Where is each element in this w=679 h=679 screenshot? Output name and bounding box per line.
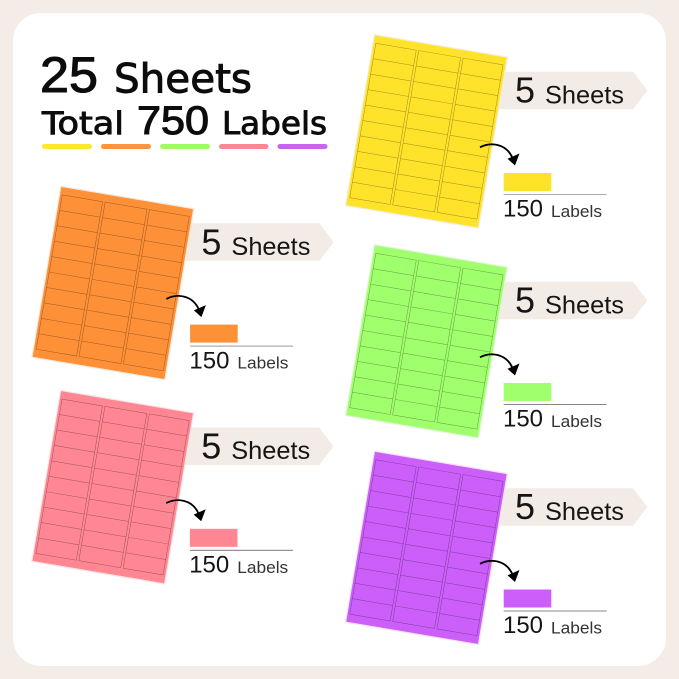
banner: 5 Sheets: Sheets (545, 498, 624, 526)
label count: 150 Labels: 150 (503, 196, 543, 223)
label count: 150 Labels: 150 (189, 551, 229, 578)
heading: Total 750 Labels: Total (41, 106, 124, 142)
label count: 150 Labels (189, 529, 293, 578)
heading: 25 Sheets: 25 (40, 47, 98, 103)
banner: 5 Sheets (490, 70, 647, 111)
heading: Total 750 Labels: Labels (222, 106, 327, 142)
banner: 5 Sheets: 5 (515, 486, 535, 527)
purple label sheet (346, 451, 507, 645)
banner: 5 Sheets (176, 426, 334, 466)
label count: 150 Labels (503, 173, 607, 223)
label count: 150 Labels: Labels (551, 202, 602, 221)
banner: 5 Sheets: Sheets (231, 437, 310, 465)
banner: 5 Sheets (490, 486, 647, 527)
label count: 150 Labels (503, 383, 607, 433)
label count: 150 Labels (503, 590, 607, 639)
heading: 25 Sheets (40, 47, 252, 103)
banner: 5 Sheets: 5 (201, 221, 221, 262)
heading: Total 750 Labels: 750 (137, 99, 209, 143)
panel: orange sheets (32, 186, 334, 380)
banner: 5 Sheets: 5 (201, 425, 221, 466)
panel: green sheets (346, 245, 647, 438)
label count: 150 Labels: Labels (551, 412, 602, 431)
heading: Total 750 Labels (41, 99, 327, 143)
label count: 150 Labels: Labels (237, 354, 288, 373)
banner: 5 Sheets: 5 (515, 70, 535, 111)
arrow (166, 500, 206, 521)
panel: purple sheets (346, 451, 647, 645)
banner: 5 Sheets: Sheets (545, 81, 624, 109)
panel: pink sheets (32, 390, 334, 584)
banner: 5 Sheets: 5 (515, 280, 535, 321)
label count: 150 Labels: Labels (551, 618, 602, 638)
arrow (480, 561, 520, 582)
label count: 150 Labels: 150 (189, 347, 229, 374)
heading: 25 Sheets: Sheets (114, 56, 252, 102)
orange label sheet (32, 186, 194, 380)
panel: yellow sheets (346, 35, 647, 228)
banner: 5 Sheets (490, 280, 647, 321)
arrow (166, 296, 206, 317)
green label sheet (346, 245, 507, 438)
label count: 150 Labels: Labels (237, 558, 288, 577)
yellow label sheet (346, 35, 507, 228)
label count: 150 Labels: 150 (503, 612, 543, 639)
label count: 150 Labels (189, 325, 293, 374)
arrow (480, 354, 520, 376)
label count: 150 Labels: 150 (503, 406, 543, 433)
banner: 5 Sheets: Sheets (545, 291, 624, 319)
banner: 5 Sheets (176, 221, 334, 262)
pink label sheet (32, 390, 194, 584)
banner: 5 Sheets: Sheets (231, 233, 310, 261)
colour key bars (42, 144, 328, 149)
arrow (480, 144, 520, 166)
title block (40, 47, 328, 149)
